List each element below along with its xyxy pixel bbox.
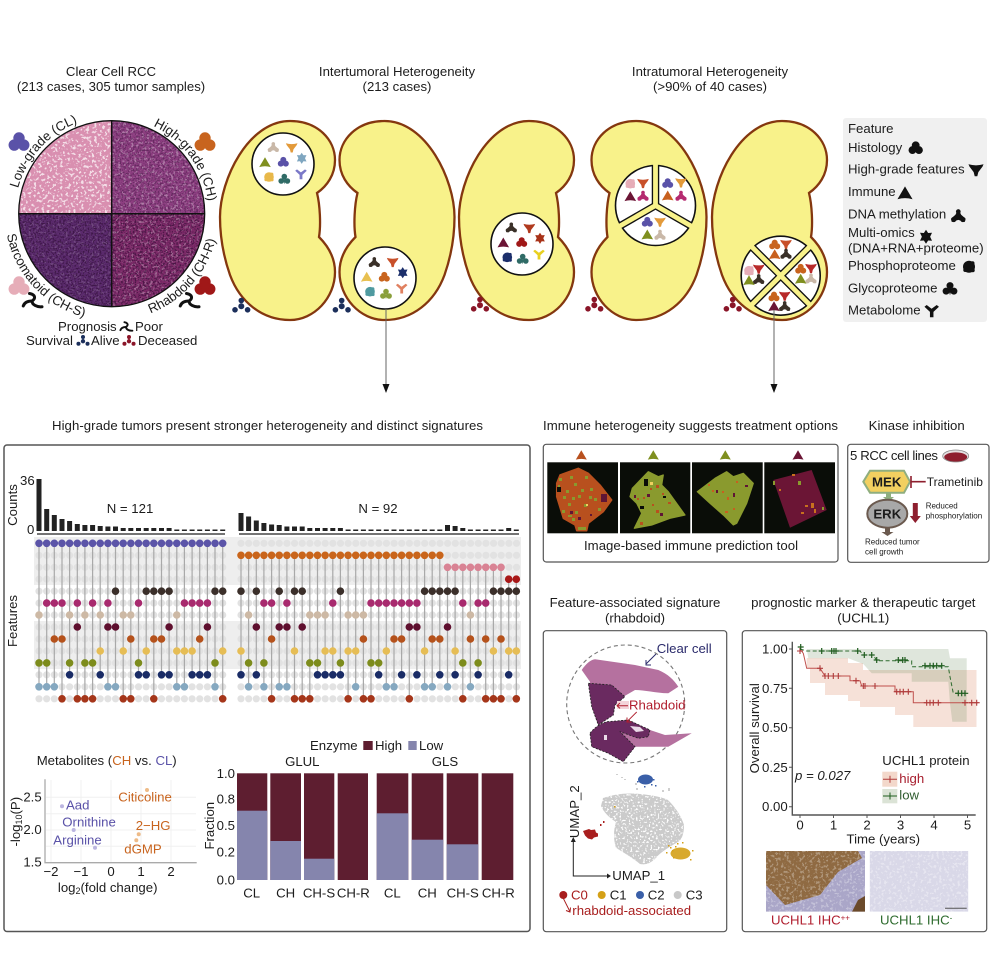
- legend: clusters: C3: [686, 887, 703, 902]
- survival chart: 0.75: [762, 681, 788, 696]
- arrow: intertumoral to bottom panel: [382, 309, 390, 393]
- scatter plot: metabolites: 2: [167, 864, 175, 879]
- label: UCHL1 IHC++: UCHL1 IHC: [771, 912, 841, 927]
- legend: clusters: C2: [648, 887, 665, 902]
- panel: kinase inhibition: [848, 444, 989, 562]
- stacked bar chart: enzyme fraction: Fraction: [202, 802, 217, 850]
- survival chart: 5: [964, 817, 971, 832]
- ERK node: ERK: [873, 506, 902, 522]
- scatter plot: metabolites: 0: [107, 864, 115, 879]
- heading: feature-associated signature: (rhabdoid): [605, 611, 665, 626]
- panel: immune prediction tool: Image-based immune prediction tool: [584, 538, 798, 553]
- panel: high-grade tumors: [4, 445, 530, 932]
- panel: feature legend: Metabolome: [848, 302, 921, 318]
- heading: Metabolites CH vs CL: Metabolites (CH vs. CL): [37, 753, 177, 768]
- heading: Clear Cell RCC: Clear Cell RCC: [66, 64, 157, 79]
- survival icon: kidney 2 alive: [333, 298, 351, 313]
- kidney 1: intertumoral low-grade: [220, 121, 335, 320]
- arrow: intratumoral to bottom panel: [770, 310, 778, 393]
- tissue map 2: [620, 462, 690, 533]
- heading: Intratumoral Heterogeneity: (>90% of 40 cases): [653, 79, 767, 94]
- heading: feature-associated signature: Feature-associated signature: [550, 595, 720, 610]
- heading: Clear Cell RCC: [17, 64, 205, 94]
- stacked bar chart: enzyme fraction: GLUL: [285, 754, 320, 769]
- survival chart: 0.25: [762, 760, 788, 775]
- legend: clusters: [559, 887, 703, 902]
- scatter plot: metabolites: 2−HG: [136, 818, 171, 833]
- legend: survival: [26, 333, 197, 348]
- panel: feature legend: Multi-omics: [848, 225, 915, 240]
- icon: sarcomatoid marker: [9, 276, 29, 295]
- legend: clusters: C0: [571, 887, 588, 902]
- panel: feature legend: Feature: [848, 121, 893, 136]
- note: reduced phosphorylation: Reduced: [926, 502, 958, 511]
- scatter plot: metabolites: −2: [43, 864, 59, 879]
- note: reduced tumor cell growth: Reduced tumor: [865, 538, 920, 547]
- stacked bar chart: enzyme fraction: 0.0: [217, 872, 235, 888]
- label: Low-grade (CL): Low-grade (CL): [10, 115, 76, 188]
- upset bar chart: counts: 0: [27, 522, 34, 537]
- scatter plot: metabolites: 1.5: [23, 855, 42, 870]
- arrow: reduced phosphorylation: [910, 503, 921, 523]
- note: reduced phosphorylation: phosphorylation: [926, 511, 982, 520]
- IHC image: UCHL1 positive: [766, 851, 865, 912]
- survival chart: 2: [863, 817, 871, 832]
- stacked bar chart: enzyme fraction: GLS: [432, 754, 458, 769]
- legend: prognosis: Prognosis: [58, 319, 117, 334]
- panel: feature legend: Glycoproteome: [848, 280, 937, 296]
- stacked bar chart: enzyme fraction: CL: [384, 886, 401, 901]
- heading: Intratumoral Heterogeneity: [632, 64, 788, 94]
- stacked bar chart: enzyme fraction: CH: [276, 886, 295, 901]
- survival chart: 0: [796, 817, 804, 832]
- scatter plot: metabolites: (P): [8, 797, 23, 814]
- tissue map 3: [692, 462, 763, 533]
- tissue map 1: [547, 462, 618, 533]
- scatter plot: metabolites: dGMP: [124, 841, 162, 856]
- legend: prognosis: Poor: [135, 319, 163, 334]
- scatter plot: metabolites: Citicoline: [118, 790, 172, 805]
- stacked bar chart: enzyme fraction: CH-R: [337, 886, 370, 901]
- kidney 5: intratumoral four regions: [712, 121, 827, 320]
- kidney 4: intratumoral three regions: [592, 121, 706, 320]
- stacked bar chart: enzyme fraction: 0.5: [217, 818, 235, 833]
- scatter plot: metabolites: log: [58, 880, 76, 895]
- survival chart: p = 0.027: [794, 768, 851, 783]
- survival icon: kidney 4 deceased: [585, 297, 603, 312]
- legend: enzyme: [310, 738, 444, 753]
- stacked bar chart: enzyme fraction: CH: [418, 886, 437, 901]
- label: High-grade (CH): High-grade (CH): [154, 118, 217, 200]
- stacked bar chart: enzyme fraction: CH-S: [447, 886, 479, 901]
- stacked bar chart: enzyme fraction: 1.0: [217, 766, 235, 781]
- kidney 2: intertumoral high-grade: [340, 121, 454, 320]
- label: Rhabdoid (CH-R): Rhabdoid (CH-R): [148, 239, 218, 313]
- scatter plot: metabolites: Aad: [66, 797, 89, 812]
- label: UCHL1 IHC-: UCHL1 IHC: [880, 912, 950, 927]
- icon: low-grade marker: [9, 132, 29, 151]
- stacked bar chart: enzyme fraction: CL: [243, 886, 260, 901]
- icon: high-grade marker: [195, 132, 215, 151]
- kidney 3: intertumoral rhabdoid: [459, 121, 574, 320]
- survival chart: Time (years): [847, 831, 920, 846]
- panel: kinase inhibition: 5 RCC cell lines: [850, 448, 938, 463]
- label: Clear cell: Clear cell: [657, 641, 712, 656]
- label: rhabdoid-associated: rhabdoid-associated: [572, 903, 691, 918]
- scatter plot: metabolites: (fold change): [81, 880, 158, 895]
- scatter plot: metabolites: 2: [76, 886, 81, 896]
- ERK node: [867, 500, 907, 528]
- scatter plot: metabolites: 1: [137, 864, 145, 879]
- upset bar chart: counts: [20, 473, 519, 537]
- heading: Intertumoral Heterogeneity: Intertumoral Heterogeneity: [319, 64, 475, 79]
- panel: feature legend: High-grade features: [848, 162, 965, 176]
- scatter plot: metabolites: Ornithine: [62, 815, 116, 830]
- inhibition bar: Trametinib: Trametinib: [927, 475, 983, 489]
- upset bar chart: counts: 36: [20, 473, 35, 488]
- IHC image: UCHL1 negative: [870, 851, 968, 912]
- upset dot matrix: [34, 537, 521, 699]
- axis label: Counts: Counts: [5, 484, 20, 526]
- survival chart: 0.50: [762, 720, 788, 735]
- upset bar chart: counts: N = 121: [107, 501, 153, 516]
- legend: enzyme: Low: [419, 738, 444, 753]
- scatter plot: metabolites: 2.5: [23, 790, 42, 804]
- survival chart: 0.00: [762, 799, 788, 814]
- heading: prognostic marker: prognostic marker & therapeutic target: [751, 595, 976, 610]
- scatter plot: metabolites: -log: [8, 825, 23, 847]
- legend: enzyme: Enzyme: [310, 738, 358, 753]
- scatter plot: metabolites: [8, 779, 197, 896]
- UMAP scatter: [583, 774, 694, 864]
- label: Sarcomatoid (CH-S): Sarcomatoid (CH-S): [8, 234, 85, 319]
- legend: UCHL1 protein: UCHL1 protein: [882, 753, 970, 768]
- legend: UCHL1 protein: high: [899, 771, 924, 786]
- heading: Intertumoral Heterogeneity: (213 cases): [363, 79, 431, 94]
- axis label: Features: Features: [5, 595, 20, 647]
- panel: feature legend: (DNA+RNA+proteome): [848, 240, 984, 256]
- heading: Clear Cell RCC: (213 cases, 305 tumor samples): [17, 79, 205, 94]
- panel: feature legend: DNA methylation: [848, 206, 946, 222]
- survival chart: 1: [830, 817, 837, 832]
- UMAP axes: UMAP_2: [567, 785, 582, 838]
- legend: enzyme: High: [375, 738, 402, 753]
- stacked bar chart: enzyme fraction: 0.2: [217, 844, 235, 860]
- survival chart: 4: [930, 817, 938, 832]
- survival chart: Overall survival: [747, 683, 762, 773]
- legend: survival: Deceased: [138, 333, 197, 348]
- icon: poor prognosis swirl left: [23, 294, 42, 307]
- note: reduced tumor cell growth: cell growth: [865, 548, 903, 557]
- MEK node: MEK: [872, 474, 902, 490]
- icon: poor prognosis swirl right: [180, 294, 199, 307]
- dashed circle with H&E tissue: [567, 645, 692, 763]
- heading: immune heterogeneity: Immune heterogeneity suggests treatment options: [543, 418, 838, 433]
- scatter plot: metabolites: Arginine: [53, 832, 102, 847]
- note: reduced tumor cell growth: [865, 538, 920, 557]
- panel: feature legend: [843, 118, 987, 322]
- survival chart: 3: [897, 817, 904, 832]
- note: reduced phosphorylation: [926, 502, 982, 520]
- UMAP axes: [567, 785, 665, 883]
- tissue map 4: [764, 462, 835, 533]
- label: Rhabdoid: Rhabdoid: [629, 698, 685, 712]
- panel: feature legend: Histology: [848, 140, 903, 155]
- heading: prognostic marker: [751, 595, 976, 626]
- panel: immune prediction tool: [543, 444, 838, 562]
- legend: survival: Alive: [91, 333, 120, 348]
- stacked bar chart: enzyme fraction: [202, 754, 515, 901]
- panel: feature legend: Phosphoproteome: [848, 258, 956, 273]
- icon: culture dish: [943, 450, 969, 462]
- label: UCHL1 IHC++: ++: [841, 913, 850, 922]
- legend: clusters: C1: [610, 887, 627, 902]
- survival icon: kidney 5 deceased: [724, 297, 742, 312]
- heading: high-grade tumors: High-grade tumors present stronger heterogeneity and distinct signatures: [52, 418, 483, 433]
- legend: prognosis: [58, 319, 163, 334]
- legend: survival: Survival: [26, 333, 73, 348]
- heading: Intertumoral Heterogeneity: [319, 64, 475, 94]
- arrow: ERK to growth: [882, 528, 894, 536]
- heading: prognostic marker: (UCHL1): [837, 611, 889, 626]
- survival chart: [747, 642, 980, 846]
- histology disc with four quadrants: [18, 120, 206, 308]
- legend: UCHL1 protein: low: [899, 788, 920, 802]
- stacked bar chart: enzyme fraction: 0.8: [217, 792, 235, 806]
- heading: feature-associated signature: [550, 595, 720, 626]
- heading: kinase inhibition: Kinase inhibition: [869, 418, 965, 433]
- survival icon: kidney 1 alive: [232, 298, 250, 313]
- panel: prognostic marker: [742, 631, 987, 932]
- survival icon: kidney 3 deceased: [471, 297, 489, 312]
- label: UCHL1 IHC-: -: [950, 913, 953, 922]
- scatter plot: metabolites: −1: [73, 864, 89, 879]
- arrow: MEK to ERK: [883, 493, 894, 502]
- MEK node: [863, 471, 910, 493]
- stacked bar chart: enzyme fraction: CH-S: [303, 886, 335, 901]
- UMAP axes: UMAP_1: [612, 868, 665, 883]
- legend: UCHL1 protein: [882, 753, 970, 803]
- label: Rhabdoid: [617, 698, 685, 722]
- scatter plot: metabolites: 10: [14, 814, 24, 825]
- panel: feature-associated signature: [543, 631, 727, 932]
- panel: feature legend: Immune: [848, 184, 896, 199]
- survival chart: 1.00: [762, 642, 788, 656]
- stacked bar chart: enzyme fraction: CH-R: [482, 886, 515, 901]
- upset bar chart: counts: N = 92: [358, 501, 398, 516]
- label: Clear cell: [646, 641, 712, 665]
- heading: Intratumoral Heterogeneity: Intratumoral Heterogeneity: [632, 64, 788, 79]
- scatter plot: metabolites: 2.0: [23, 822, 42, 837]
- icon: rhabdoid marker: [195, 276, 215, 295]
